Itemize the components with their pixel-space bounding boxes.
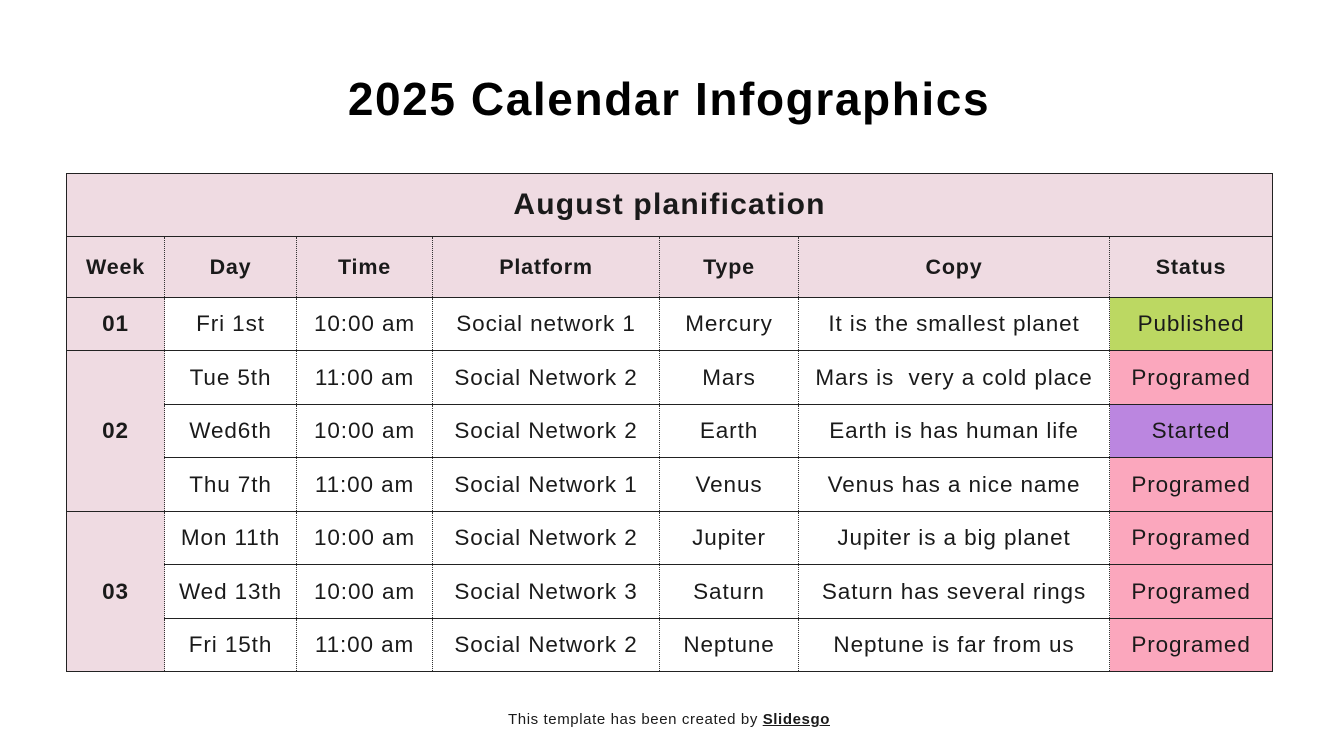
- row: week 02 Wed: 10:00 am: [314, 418, 415, 443]
- footer credit: This template has been created by Slidesgo: [508, 711, 830, 728]
- header row: Week: [86, 254, 145, 278]
- row: week 02 Tue: 11:00 am: [315, 364, 414, 390]
- row: week 02 Thu: 11:00 am: [315, 472, 414, 496]
- row: week 03 Mon: Jupiter is a big planet: [837, 525, 1071, 550]
- row: week 01: It is the smallest planet: [828, 311, 1080, 336]
- header row: [67, 237, 1272, 297]
- row: week 01: 10:00 am: [314, 311, 415, 336]
- header row: Copy: [926, 254, 982, 278]
- table caption row: August planification: [513, 188, 826, 221]
- row: week 03 Mon: Social Network 2: [454, 525, 638, 550]
- header row: Status: [1156, 254, 1226, 278]
- row: week 02 Thu: Venus: [695, 472, 763, 496]
- header row: Day: [210, 254, 251, 278]
- row: week 02 Tue: Programed: [1131, 364, 1251, 390]
- row: week 03 Fri: [189, 619, 1272, 671]
- row: week 03 Wed: Programed: [1131, 578, 1251, 604]
- row: week 01: Social network 1: [456, 311, 636, 336]
- row: week 02 Tue: Mars is very a cold place: [815, 364, 1093, 390]
- row: week 01: Fri 1st: [196, 311, 265, 336]
- row: week 03 Fri: Programed: [1131, 632, 1251, 657]
- row: week 03 Fri: Social Network 2: [454, 632, 638, 657]
- row: week 02 Wed: Earth is has human life: [829, 418, 1079, 443]
- table: August planification: [66, 173, 1273, 672]
- row: week 02 Thu: Thu 7th: [189, 472, 272, 496]
- row: week 02 Tue: Tue 5th: [190, 364, 271, 390]
- row: week 03 Wed: Social Network 3: [454, 578, 638, 604]
- row: week 03 Fri: 11:00 am: [315, 632, 414, 657]
- row: week 02 Wed: Wed6th: [189, 418, 272, 443]
- row: week 03 Fri: Neptune is far from us: [833, 632, 1075, 657]
- row: week 03 Mon: 10:00 am: [314, 525, 415, 550]
- row: week 03 Wed: [179, 565, 1272, 618]
- row: week 03 Fri: Fri 15th: [189, 632, 272, 657]
- row: week 01: Published: [1138, 311, 1244, 336]
- table caption row: [67, 174, 1272, 671]
- header row: Platform: [499, 254, 593, 278]
- row: week 02 Thu: Venus has a nice name: [828, 472, 1080, 496]
- row: week 03 Wed: Saturn has several rings: [822, 578, 1086, 604]
- row: week 02 Thu: [189, 458, 1272, 511]
- row: week 02 Wed: Earth: [700, 418, 758, 443]
- row: week 03 Mon: [67, 512, 1272, 671]
- title: 2025 Calendar Infographics: [348, 73, 990, 125]
- row: week 03 Fri: Neptune: [683, 632, 775, 657]
- row: week 03 Wed: Saturn: [693, 578, 765, 604]
- row: week 03 Mon: Programed: [1131, 525, 1251, 550]
- header row: Time: [338, 254, 391, 278]
- row: week 03 Mon: Mon 11th: [181, 525, 280, 550]
- row: week 02 Wed: Started: [1152, 418, 1230, 443]
- row: week 01: 01: [102, 311, 129, 336]
- row: week 03 Wed: 10:00 am: [314, 578, 415, 604]
- row: week 01: Mercury: [685, 311, 773, 336]
- header row: Type: [703, 254, 755, 278]
- row: week 02 Thu: Social Network 1: [454, 472, 638, 496]
- row: week 03 Mon: Jupiter: [692, 525, 766, 550]
- row: week 02 Tue: [67, 351, 1272, 511]
- row: week 02 Wed: [189, 405, 1272, 457]
- row: week 01: [67, 298, 1272, 350]
- row: week 03 Wed: Wed 13th: [179, 578, 282, 604]
- table caption row: 03: [102, 578, 129, 604]
- row: week 02 Thu: Programed: [1131, 472, 1251, 496]
- table caption row: 02: [102, 418, 129, 443]
- row: week 02 Tue: Mars: [702, 364, 756, 390]
- row: week 02 Wed: Social Network 2: [454, 418, 638, 443]
- row: week 02 Tue: Social Network 2: [454, 364, 638, 390]
